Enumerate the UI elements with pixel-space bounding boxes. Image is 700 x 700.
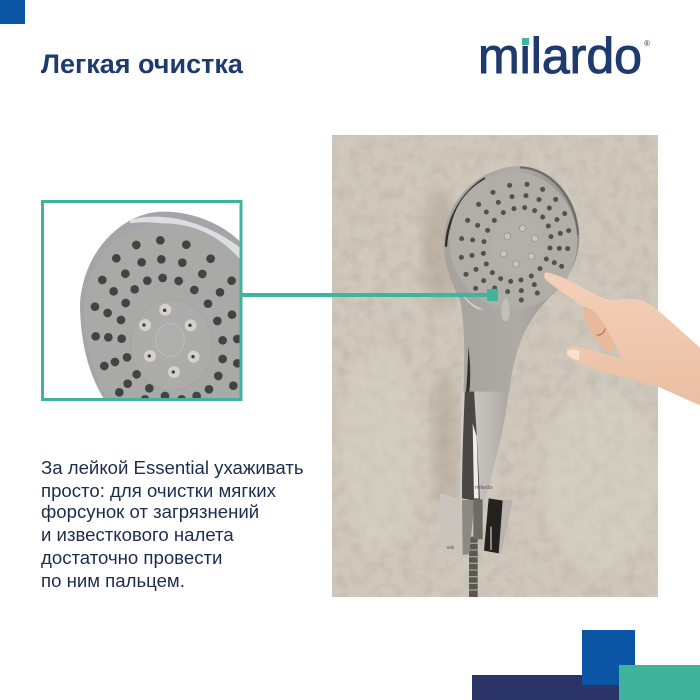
logo: milardo: milardo	[478, 28, 642, 84]
thumb nail	[567, 349, 580, 360]
mount right part	[484, 498, 513, 553]
corner square: top left	[0, 0, 25, 24]
nozzle holes	[142, 309, 195, 374]
spray dots	[91, 236, 242, 404]
rim	[80, 212, 243, 403]
body text: просто: для очистки мягких	[41, 480, 277, 501]
hand pointing at the nozzles	[544, 272, 700, 407]
palm, index finger and thumb	[544, 272, 700, 407]
body text: и известкового налета	[41, 524, 234, 545]
hose	[469, 537, 478, 598]
body text: достаточно провести	[41, 547, 222, 568]
body text: по ним пальцем.	[41, 570, 185, 591]
inset frame	[42, 202, 241, 400]
folded finger	[583, 309, 615, 352]
finger crease	[597, 328, 605, 335]
decorative blocks: bottom right	[472, 630, 700, 700]
title: Легкая очистка	[41, 49, 244, 79]
handle logo text: milardo	[475, 485, 493, 491]
chrome body	[444, 166, 579, 392]
shower head	[444, 166, 579, 392]
centre cap	[156, 323, 184, 357]
inner plate	[131, 300, 212, 390]
body text: За лейкой Essential ухаживать	[41, 457, 304, 478]
photo: shower head on concrete wall with hand	[332, 135, 700, 598]
mount left part: mlb	[447, 545, 455, 550]
concrete wall	[332, 135, 660, 597]
body text: форсунок от загрязнений	[41, 501, 259, 522]
central nozzles	[139, 304, 200, 378]
central nozzles	[500, 225, 538, 267]
inset: close-up of shower face	[42, 202, 243, 404]
lever	[501, 298, 510, 322]
shower handle, lower part	[461, 378, 510, 502]
inner ring	[491, 216, 544, 274]
face plate	[449, 172, 577, 309]
logo: milardo: ®	[644, 39, 650, 48]
connector line with square marker	[242, 289, 498, 301]
wall mount and hose	[440, 493, 513, 598]
spray dots	[459, 182, 571, 302]
face	[162, 223, 240, 260]
mount centre	[473, 499, 483, 539]
